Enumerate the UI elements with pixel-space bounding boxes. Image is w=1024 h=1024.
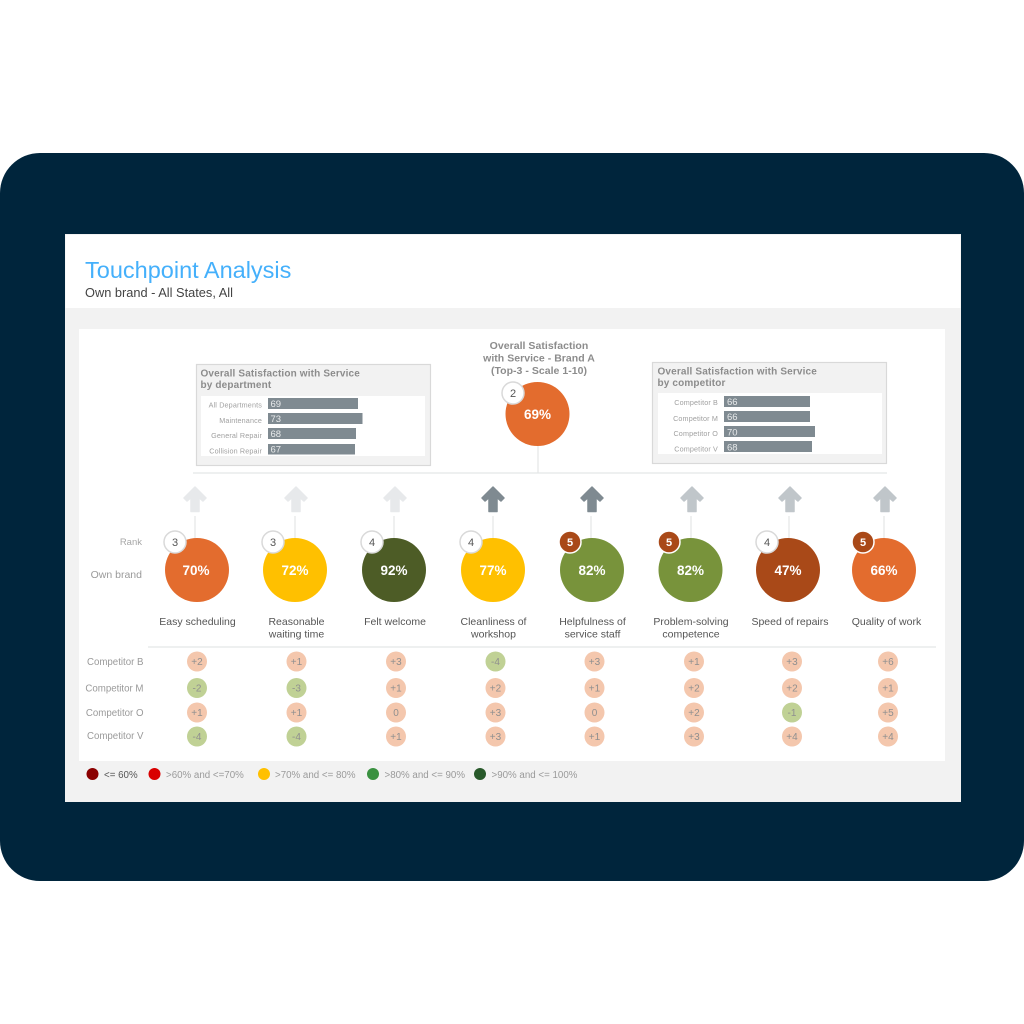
bar: Competitor M: 66: [727, 412, 738, 423]
overall satisfaction heading: (Top-3 - Scale 1-10): [491, 365, 587, 377]
arrow 7: [779, 487, 801, 512]
touchpoint: easy scheduling: 3: [172, 537, 178, 549]
panel heading: competitor: Overall Satisfaction with Service: [658, 366, 817, 378]
touchpoint: cleanliness of workshop: [460, 531, 527, 640]
competitor row: M: +1: [589, 684, 601, 694]
competitor row: M: -2: [193, 684, 202, 694]
touchpoint: cleanliness of workshop: workshop: [470, 628, 516, 640]
bar: Collision Repair: [209, 444, 355, 456]
competitor row: O: -1: [788, 708, 797, 719]
bar: Competitor O: Competitor O: [673, 429, 718, 438]
touchpoint: felt welcome: [361, 531, 426, 628]
bar: All Departments: All Departments: [209, 400, 262, 410]
bar: Competitor M: Competitor M: [673, 414, 718, 423]
legend item: 70 to 80%: [258, 768, 356, 781]
touchpoint: easy scheduling: 70%: [182, 563, 210, 578]
bar: Competitor V: [674, 441, 812, 454]
panel: satisfaction by department: [196, 364, 430, 466]
legend item: 80 to 90%: [367, 768, 465, 781]
touchpoint: problem-solving competence: competence: [662, 628, 720, 640]
competitor row: B: [87, 652, 898, 672]
touchpoint: reasonable waiting time: 3: [270, 537, 276, 549]
arrow 5: [581, 487, 603, 512]
competitor row: V: -4: [193, 732, 202, 743]
touchpoint: helpfulness of service staff: 5: [567, 537, 573, 549]
arrow 8: [874, 487, 896, 512]
competitor row: M: [85, 678, 898, 698]
touchpoint: speed of repairs: 47%: [774, 563, 802, 578]
touchpoint: reasonable waiting time: Reasonable: [268, 616, 325, 628]
competitor row: O: +3: [490, 708, 502, 719]
legend item: 70 to 80%: >70% and <= 80%: [275, 770, 356, 781]
overall score circle: 69%: [524, 407, 551, 422]
bar: All Departments: [209, 398, 358, 410]
competitor row: B: +3: [589, 657, 601, 668]
touchpoint: cleanliness of workshop: 77%: [479, 563, 507, 578]
touchpoint: reasonable waiting time: waiting time: [268, 628, 324, 640]
touchpoint: helpfulness of service staff: Helpfulness of: [559, 616, 626, 628]
arrow 4: [482, 487, 504, 512]
competitor row: V: [87, 726, 898, 746]
competitor row: M: +1: [390, 684, 402, 694]
touchpoint: problem-solving competence: 82%: [677, 563, 704, 578]
bar: General Repair: 68: [270, 429, 281, 440]
touchpoint: reasonable waiting time: [262, 531, 327, 640]
bar: Competitor B: 66: [727, 397, 738, 408]
competitor row: B: +2: [191, 657, 203, 668]
bar: Maintenance: [219, 413, 362, 425]
arrow 2: [285, 487, 307, 512]
legend item: 90 to 100%: >90% and <= 100%: [492, 770, 578, 781]
bar: General Repair: [211, 428, 356, 440]
bar: Competitor B: Competitor B: [674, 398, 718, 407]
overall satisfaction heading: with Service - Brand A: [482, 352, 595, 364]
competitor row: O: 0: [393, 708, 399, 719]
legend item: 80 to 90%: >80% and <= 90%: [384, 770, 465, 781]
competitor row: M: +2: [688, 684, 700, 694]
touchpoint: speed of repairs: 4: [764, 537, 770, 549]
touchpoint: problem-solving competence: [653, 531, 729, 640]
bar: All Departments: 69: [270, 399, 281, 410]
bar: Collision Repair: 67: [270, 444, 281, 456]
touchpoint: speed of repairs: [751, 531, 829, 628]
connector lines: [193, 446, 887, 540]
subtitle: Own brand - All States, All: [85, 285, 233, 300]
overall satisfaction heading: Overall Satisfaction: [490, 340, 588, 352]
competitor row: M: -3: [292, 684, 301, 694]
bar: Collision Repair: Collision Repair: [209, 446, 262, 456]
touchpoint: helpfulness of service staff: [559, 531, 626, 640]
touchpoint: quality of work: 66%: [870, 563, 898, 578]
arrow 1: [184, 487, 206, 512]
row label: own brand: Own brand: [91, 569, 142, 581]
legend item: up to 60%: [86, 768, 138, 781]
competitor row: O: [86, 702, 898, 722]
touchpoint: helpfulness of service staff: service staff: [565, 628, 620, 640]
divider: [148, 646, 936, 648]
touchpoint: cleanliness of workshop: Cleanliness of: [461, 616, 526, 628]
competitor row: V: +3: [490, 732, 502, 743]
touchpoint: reasonable waiting time: 72%: [281, 563, 309, 578]
competitor row: M: +2: [490, 684, 502, 694]
competitor row: B: +3: [786, 657, 798, 668]
bar: Competitor O: 70: [727, 428, 738, 438]
arrows row: [184, 487, 896, 512]
panel heading: department: by department: [200, 380, 272, 391]
competitor row: B: -4: [491, 657, 500, 668]
touchpoint: felt welcome: 4: [369, 537, 375, 549]
arrow 6: [681, 487, 703, 512]
competitor row: B: +1: [688, 657, 700, 668]
touchpoint: speed of repairs: Speed of repairs: [751, 616, 829, 628]
legend: [86, 768, 578, 781]
title: Touchpoint Analysis: [85, 257, 291, 283]
touchpoint: easy scheduling: [159, 531, 236, 628]
bar: Competitor O: [673, 426, 815, 438]
dashboard panel: [65, 234, 961, 802]
bar: Competitor V: 68: [727, 442, 738, 454]
touchpoint: felt welcome: Felt welcome: [364, 616, 426, 628]
competitor row: V: Competitor V: [87, 731, 144, 742]
legend item: up to 60%: <= 60%: [104, 770, 138, 781]
bar: Competitor M: [673, 411, 810, 423]
competitor row: V: +4: [786, 732, 798, 743]
competitor row: V: +3: [688, 732, 700, 743]
touchpoint: felt welcome: 92%: [380, 563, 408, 578]
legend item: 60 to 70%: >60% and <=70%: [166, 770, 244, 781]
bar: General Repair: General Repair: [211, 431, 262, 440]
touchpoint: quality of work: [852, 531, 922, 628]
panel heading: competitor: by competitor: [658, 378, 726, 389]
overall score circle: 2: [510, 388, 516, 400]
row label: rank: Rank: [120, 537, 142, 548]
competitor row: V: +1: [390, 732, 402, 743]
dark navy frame: [0, 153, 1024, 881]
competitor row: B: +1: [291, 657, 303, 668]
panel heading: department: Overall Satisfaction with Service: [200, 368, 360, 380]
competitor row: B: Competitor B: [87, 657, 144, 668]
competitor row: V: +4: [882, 732, 894, 743]
competitor row: M: +2: [786, 684, 798, 694]
competitor row: O: +1: [291, 708, 303, 719]
legend item: 60 to 70%: [148, 768, 244, 781]
touchpoint: problem-solving competence: 5: [666, 537, 672, 549]
touchpoint: problem-solving competence: Problem-solving: [653, 616, 729, 628]
competitor row: O: 0: [592, 708, 598, 719]
competitor row: M: +1: [882, 684, 894, 694]
panel: satisfaction by competitor: [652, 362, 886, 464]
overall score circle: [502, 382, 570, 446]
bar: Maintenance: 73: [270, 414, 281, 425]
touchpoint: quality of work: 5: [860, 537, 866, 549]
competitor row: M: Competitor M: [85, 684, 144, 694]
touchpoint: cleanliness of workshop: 4: [468, 537, 474, 549]
bar: Competitor V: Competitor V: [674, 444, 718, 454]
competitor row: V: -4: [292, 732, 301, 743]
competitor row: O: Competitor O: [86, 708, 144, 719]
touchpoint: easy scheduling: Easy scheduling: [159, 616, 236, 628]
arrow 3: [384, 487, 406, 512]
competitor row: V: +1: [589, 732, 601, 743]
competitor row: O: +5: [882, 708, 894, 719]
competitor row: B: +3: [390, 657, 402, 668]
competitor row: O: +2: [688, 708, 700, 719]
touchpoint: helpfulness of service staff: 82%: [578, 563, 606, 578]
bar: Competitor B: [674, 396, 810, 408]
touchpoint: quality of work: Quality of work: [852, 616, 922, 628]
bar: Maintenance: Maintenance: [219, 416, 262, 425]
competitor row: B: +6: [882, 657, 894, 668]
competitor row: O: +1: [191, 708, 203, 719]
